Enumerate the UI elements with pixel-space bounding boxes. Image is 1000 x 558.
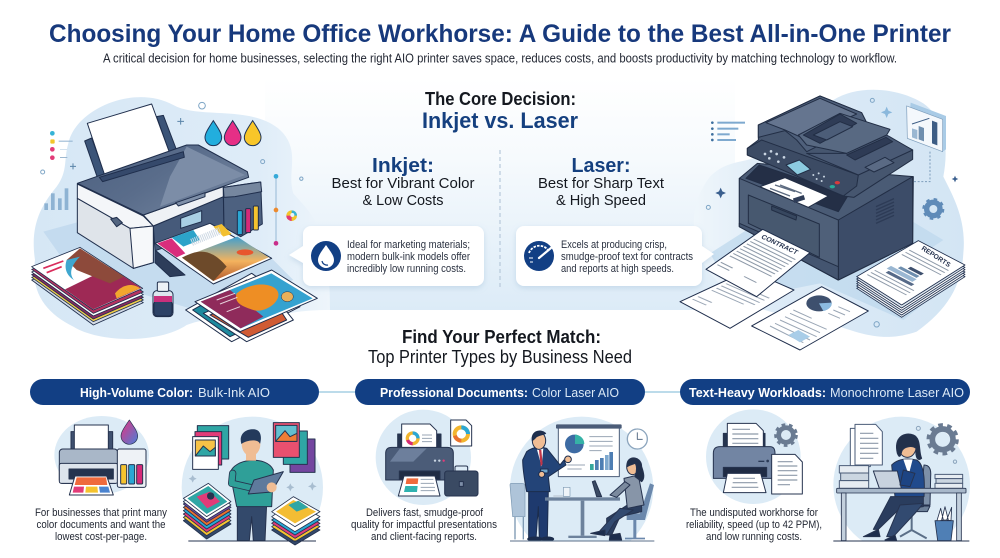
icon: gear bbox=[924, 200, 943, 218]
illustration: laser printer scene bbox=[680, 90, 965, 350]
callout text bbox=[561, 239, 694, 275]
illustration: inkjet printer scene bbox=[32, 97, 330, 342]
laser printer body bbox=[739, 96, 913, 280]
pill: text-heavy workloads bbox=[680, 379, 970, 405]
floor shadow bbox=[43, 213, 293, 313]
text: bulk-ink description: color documents and want the bbox=[36, 519, 166, 531]
pill: high-volume color: High-Volume Color: bbox=[80, 385, 193, 400]
text: bulk-ink description bbox=[35, 507, 167, 543]
text: bulk-ink description: lowest cost-per-page. bbox=[55, 531, 147, 543]
floor shadow bbox=[710, 220, 953, 320]
text: monochrome laser description: reliability, speed (up to 42 PPM), bbox=[686, 519, 822, 531]
callout text: and reports at high speeds. bbox=[561, 263, 674, 275]
ink bottle bbox=[153, 282, 173, 317]
table bbox=[545, 487, 620, 538]
icon: sparkles and rings bbox=[41, 102, 303, 180]
text: colour laser description: quality for impactful presentations bbox=[351, 519, 497, 531]
illustration: colour laser printer icon bbox=[376, 410, 478, 505]
icon: rings bbox=[706, 98, 879, 327]
callout text: Excels at producing crisp, bbox=[561, 239, 667, 251]
presentation board bbox=[556, 424, 622, 477]
illustration: woman working at desk bbox=[833, 417, 970, 553]
person bbox=[230, 429, 283, 541]
title: Choosing Your Home Office Workhorse: A Guide to the Best All-in-One Printer bbox=[49, 20, 951, 48]
column: inkjet bbox=[332, 155, 475, 209]
pill: high-volume color bbox=[30, 379, 319, 405]
printer: paper and support bbox=[85, 104, 177, 179]
pill: professional documents bbox=[355, 379, 645, 405]
illustration: person with colour prints bbox=[182, 417, 323, 558]
icon: list lines bbox=[711, 121, 745, 141]
text: bulk-ink description: For businesses that print many bbox=[35, 507, 167, 519]
sheet: pie chart page bbox=[752, 287, 868, 350]
woman and chair bbox=[863, 434, 931, 541]
document pile bbox=[839, 424, 963, 488]
heading: the core decision bbox=[422, 89, 578, 133]
icon: decorative dots list bbox=[50, 131, 73, 160]
column: laser: Laser: bbox=[572, 155, 630, 177]
icon: water drop bbox=[311, 241, 341, 271]
gauge line bbox=[274, 174, 278, 246]
text: colour laser description: and client-facing reports. bbox=[371, 531, 477, 543]
icon: chart card bbox=[907, 103, 946, 182]
printer: body bbox=[77, 145, 262, 277]
pill: text-heavy workloads: Monochrome Laser AIO bbox=[830, 385, 964, 400]
heading: find your perfect match: Find Your Perfect Match: bbox=[402, 326, 601, 347]
text: colour laser description: Delivers fast, smudge-proof bbox=[366, 507, 484, 519]
callout text: modern bulk-ink models offer bbox=[347, 251, 470, 263]
pill: professional documents: Color Laser AIO bbox=[532, 385, 619, 400]
empty chair bbox=[510, 483, 525, 539]
label: reports: REPORTS bbox=[920, 245, 952, 269]
icon: small bar chart bbox=[44, 188, 68, 210]
sparkles bbox=[189, 475, 317, 491]
reports stack bbox=[857, 241, 965, 317]
waste bin bbox=[935, 507, 953, 541]
sheet: under page bbox=[680, 270, 794, 328]
text: colour laser description bbox=[351, 507, 497, 543]
seated woman bbox=[591, 458, 644, 540]
callout: laser bbox=[516, 226, 714, 286]
clock bbox=[627, 429, 647, 449]
icon: sparkles bbox=[715, 107, 958, 198]
chair for seated woman bbox=[625, 483, 654, 539]
gear bbox=[776, 425, 796, 445]
printer buttons and vent bbox=[764, 150, 894, 223]
colour documents bbox=[193, 423, 315, 472]
column: inkjet: Best for Vibrant Color bbox=[332, 175, 475, 192]
illustration: monochrome laser printer icon bbox=[706, 409, 802, 504]
icon: speedometer bbox=[524, 241, 554, 271]
printer: output sheet bbox=[155, 223, 272, 284]
printer bbox=[713, 423, 802, 494]
text: monochrome laser description: The undisputed workhorse for bbox=[690, 507, 818, 519]
column: laser: Best for Sharp Text bbox=[538, 175, 665, 192]
blob background bbox=[694, 90, 964, 337]
column: inkjet: & Low Costs bbox=[362, 192, 444, 209]
column: laser bbox=[538, 155, 665, 209]
pill: professional documents: Professional Documents: bbox=[380, 385, 528, 400]
blob background bbox=[34, 97, 330, 339]
small document with donut bbox=[451, 420, 472, 446]
divider bbox=[499, 150, 501, 290]
illustration: presentation scene bbox=[510, 416, 654, 542]
sheet: contract bbox=[706, 229, 810, 297]
icon: ink drops bbox=[205, 121, 261, 146]
presenter bbox=[523, 431, 571, 541]
desk bbox=[837, 488, 966, 541]
gear bbox=[928, 425, 957, 454]
column: laser: & High Speed bbox=[556, 192, 646, 209]
stacks of colour prints bbox=[183, 483, 320, 545]
callout text: incredibly low running costs. bbox=[347, 263, 466, 275]
icon: colour wheel bbox=[286, 210, 297, 221]
callout text: Ideal for marketing materials; bbox=[347, 239, 470, 251]
background band: core decision bbox=[265, 78, 735, 310]
subtitle: A critical decision for home businesses, selecting the right AIO printer saves space, reduces costs, and boosts productivity by matching technology to workflow. bbox=[103, 52, 897, 66]
printer bbox=[386, 424, 478, 496]
label: contract: CONTRACT bbox=[759, 234, 799, 256]
heading: the core decision: Inkjet vs. Laser bbox=[422, 108, 578, 133]
illustration: bulk-ink printer icon bbox=[54, 416, 149, 495]
text: monochrome laser description bbox=[686, 507, 822, 543]
text: monochrome laser description: and low running costs. bbox=[706, 531, 802, 543]
column: inkjet: Inkjet: bbox=[372, 155, 434, 177]
heading: the core decision: The Core Decision: bbox=[425, 89, 576, 109]
callout text: smudge-proof text for contracts bbox=[561, 251, 694, 263]
heading: find your perfect match: Top Printer Types by Business Need bbox=[368, 347, 632, 367]
brochure stack bbox=[32, 247, 143, 325]
callout text bbox=[347, 239, 470, 275]
small rings bbox=[916, 426, 957, 463]
connector lines bbox=[319, 391, 680, 393]
pill: high-volume color: Bulk-Ink AIO bbox=[198, 385, 270, 400]
pill: text-heavy workloads: Text-Heavy Workloads: bbox=[689, 385, 826, 400]
photo prints bbox=[186, 270, 317, 342]
heading: find your perfect match bbox=[368, 326, 632, 367]
callout: inkjet bbox=[289, 226, 484, 286]
